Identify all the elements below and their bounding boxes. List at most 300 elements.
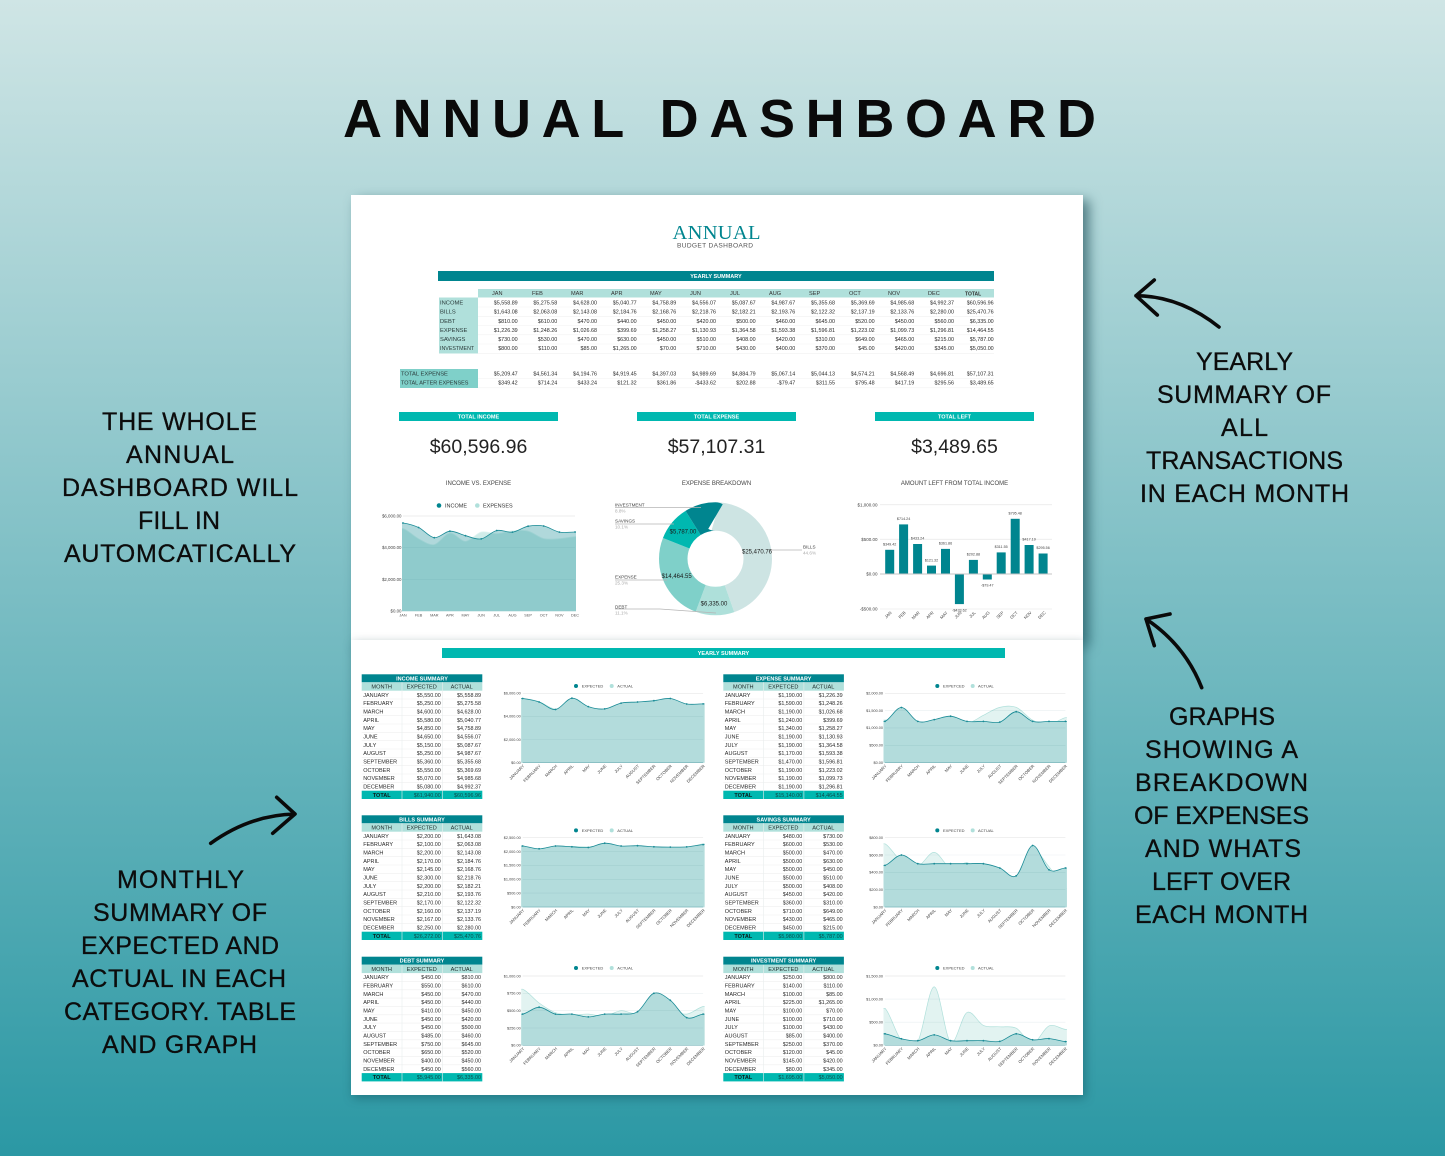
table: investment summary: INVESTMENT SUMMARY — [751, 959, 817, 965]
table: bills summary: $2,210.00 — [417, 892, 441, 898]
table: debt summary: ACTUAL — [451, 967, 473, 973]
chart: income vs expense: $6,000.00 — [382, 514, 402, 518]
table: investment summary: FEBRUARY — [725, 984, 755, 990]
section header: yearly summary — [442, 648, 1005, 658]
table: income summary: OCTOBER — [363, 768, 390, 774]
chart: savings expected vs actual: AUGUST — [987, 908, 1003, 924]
panel: yearly summary table: $2,218.76 — [692, 310, 716, 316]
table: bills summary: $2,170.00 — [417, 900, 441, 906]
table: income summary: $4,600.00 — [417, 709, 441, 715]
table: debt summary: $500.00 — [462, 1025, 481, 1031]
annotation: monthly summary: AND GRAPH — [102, 1031, 257, 1059]
table: bills summary: JUNE — [363, 875, 378, 881]
panel: yearly summary table: $1,265.00 — [613, 346, 637, 352]
table: investment summary: $45.00 — [826, 1050, 843, 1056]
panel: yearly summary table: $800.00 — [498, 346, 518, 352]
panel: yearly summary table: $121.32 — [617, 381, 637, 387]
table: expense summary: OCTOBER — [725, 768, 752, 774]
table: bills summary: MONTH — [371, 825, 392, 831]
panel: yearly summary table: $417.19 — [895, 381, 914, 387]
panel: yearly summary table: $450.00 — [657, 319, 676, 325]
chart: expense breakdown donut — [615, 481, 816, 616]
chart: income expected vs actual — [504, 683, 713, 785]
table: investment summary: $225.00 — [783, 1000, 802, 1006]
table: bills summary: $2,063.08 — [457, 842, 481, 848]
table: investment summary: OCTOBER — [725, 1050, 752, 1056]
table: expense summary — [723, 674, 844, 799]
panel: yearly summary table: $5,050.00 — [970, 346, 994, 352]
panel: yearly summary table: $5,558.89 — [494, 300, 518, 306]
table: debt summary: DECEMBER — [363, 1067, 394, 1073]
panel: yearly summary table — [400, 271, 994, 388]
panel: yearly summary table: $420.00 — [776, 337, 795, 343]
table: expense summary: $399.69 — [823, 718, 843, 724]
chart: expense expected vs actual: NOVEMBER — [1031, 763, 1052, 784]
chart: income expected vs actual: $2,000.00 — [504, 738, 521, 742]
annotation: yearly summary: YEARLY — [1196, 348, 1293, 376]
panel: yearly summary table: $5,355.68 — [811, 300, 835, 306]
table: income summary: $4,992.37 — [457, 784, 481, 790]
chart: amount left from total income: FEB — [897, 610, 907, 619]
annotation: monthly summary: CATEGORY. TABLE — [64, 998, 296, 1026]
chart: investment expected vs actual: JANUARY — [870, 1046, 888, 1063]
table: debt summary: FEBRUARY — [363, 984, 393, 990]
table: bills summary: $2,200.00 — [417, 884, 441, 890]
chart: debt expected vs actual: JUNE — [596, 1046, 608, 1057]
table: investment summary: $800.00 — [823, 975, 843, 981]
chart: expense expected vs actual: $2,000.00 — [866, 692, 883, 696]
panel: yearly summary table: $430.00 — [736, 346, 756, 352]
table: expense summary: SEPTEMBER — [725, 759, 759, 765]
table: savings summary: JANUARY — [725, 834, 751, 840]
chart: income vs expense: SEP — [524, 614, 532, 618]
table: investment summary: MAY — [725, 1009, 737, 1015]
chart: expense expected vs actual: DECEMBER — [1048, 763, 1068, 784]
chart: bills expected vs actual: MARCH — [544, 908, 558, 922]
panel: yearly summary table: $5,044.13 — [811, 372, 835, 378]
chart: income expected vs actual: JANUARY — [508, 763, 526, 781]
table: income summary: $5,087.67 — [457, 743, 481, 749]
table: savings summary: DECEMBER — [725, 925, 756, 931]
table: investment summary: $5,050.00 — [819, 1075, 843, 1081]
chart: amount left from total income: $295.56 — [1036, 546, 1050, 550]
table: savings summary: $5,980.00 — [778, 934, 802, 940]
annotation: monthly summary: MONTHLY — [117, 866, 244, 894]
panel: yearly summary table: $57,107.31 — [967, 372, 994, 378]
table: debt summary: APRIL — [363, 1000, 379, 1006]
table: income summary: MAY — [363, 726, 375, 732]
panel: yearly summary table: $4,884.79 — [732, 372, 756, 378]
chart: expense breakdown donut: BILLS — [803, 545, 816, 550]
table: investment summary: $85.00 — [826, 992, 843, 998]
chart: bills expected vs actual — [504, 828, 713, 930]
table: expense summary: APRIL — [725, 718, 741, 724]
chart: bills expected vs actual: JANUARY — [508, 908, 526, 925]
annotation: whole dashboard fills automatically: THE WHOLE — [102, 408, 257, 436]
chart: income vs expense: JAN — [399, 614, 407, 618]
table: investment summary: $70.00 — [826, 1009, 843, 1015]
chart: investment expected vs actual: $1,000.00 — [866, 997, 883, 1001]
panel: yearly summary table: $470.00 — [578, 319, 597, 325]
table: bills summary: $2,280.00 — [457, 925, 481, 931]
table: expense summary: JULY — [725, 743, 738, 749]
kpi: total income: TOTAL INCOME — [458, 414, 499, 420]
chart: expense expected vs actual: $1,500.00 — [866, 709, 883, 713]
table: investment summary: $110.00 — [824, 984, 843, 990]
panel: yearly summary table: $310.00 — [816, 337, 835, 343]
table: income summary: $61,940.00 — [414, 793, 441, 799]
table: income summary: $5,070.00 — [417, 776, 441, 782]
chart: expense breakdown donut: INVESTMENT — [615, 502, 645, 508]
section header: yearly summary: YEARLY SUMMARY — [698, 651, 750, 657]
table: income summary: $5,275.58 — [457, 701, 481, 707]
table: bills summary: MARCH — [363, 850, 383, 856]
chart: expense expected vs actual: $0.00 — [873, 761, 883, 765]
chart: debt expected vs actual: FEBRUARY — [522, 1046, 542, 1066]
table: savings summary: $465.00 — [823, 917, 843, 923]
table: income summary: NOVEMBER — [363, 776, 395, 782]
table: debt summary: $450.00 — [421, 975, 441, 981]
table: savings summary: $630.00 — [823, 859, 843, 865]
chart: expense expected vs actual: EXPETCED — [943, 683, 965, 688]
table: debt summary: $650.00 — [421, 1050, 441, 1056]
table: savings summary: $360.00 — [783, 900, 802, 906]
panel: yearly summary table: $460.00 — [776, 319, 795, 325]
panel: yearly summary table: $4,989.69 — [692, 372, 716, 378]
table: debt summary: $450.00 — [421, 1067, 441, 1073]
table: bills summary: APRIL — [363, 859, 379, 865]
panel: yearly summary table: $1,226.39 — [494, 328, 518, 334]
table: investment summary: $370.00 — [823, 1042, 843, 1048]
panel: yearly summary table: $1,248.26 — [533, 328, 557, 334]
panel: yearly summary table: SAVINGS — [440, 337, 465, 343]
chart: income vs expense: FEB — [415, 614, 423, 618]
panel: yearly summary table: $4,919.45 — [613, 372, 637, 378]
table: expense summary: $1,026.68 — [819, 709, 843, 715]
chart: income expected vs actual: EXPECTED — [582, 683, 603, 688]
table: bills summary: $2,133.76 — [457, 917, 481, 923]
chart: income expected vs actual: ACTUAL — [617, 683, 634, 688]
panel: yearly summary table: $1,223.02 — [851, 328, 875, 334]
panel: yearly summary table: $2,193.76 — [771, 310, 795, 316]
table: expense summary: AUGUST — [725, 751, 748, 757]
panel: yearly summary table: $2,122.32 — [811, 310, 835, 316]
annotation: whole dashboard fills automatically: ANNUAL — [126, 441, 234, 469]
chart: income vs expense: INCOME — [445, 504, 467, 510]
table: debt summary: $450.00 — [462, 1009, 481, 1015]
chart: expense breakdown donut: EXPENSE — [615, 575, 637, 580]
table: debt summary: $645.00 — [462, 1042, 481, 1048]
panel: yearly summary table: $25,470.76 — [967, 310, 994, 316]
chart: bills expected vs actual: EXPECTED — [582, 828, 603, 833]
chart: income expected vs actual: JUNE — [596, 763, 608, 775]
panel: yearly summary table: $4,987.67 — [771, 300, 795, 306]
dashboard paper: lower sheet — [351, 640, 1083, 1095]
chart: amount left from total income: -$79.47 — [981, 584, 994, 588]
panel: yearly summary table: $1,258.27 — [652, 328, 676, 334]
table: investment summary: $345.00 — [823, 1067, 843, 1073]
table: debt summary: $550.00 — [421, 984, 441, 990]
table: debt summary: $6,335.00 — [457, 1075, 481, 1081]
table: expense summary: EXPENSE SUMMARY — [756, 676, 812, 682]
table: debt summary: $410.00 — [421, 1009, 441, 1015]
chart: savings expected vs actual: $200.00 — [869, 888, 883, 892]
table: savings summary: $500.00 — [783, 850, 802, 856]
chart: expense expected vs actual — [866, 683, 1075, 785]
chart: income expected vs actual: JULY — [613, 763, 624, 774]
panel: yearly summary table: SEP — [809, 291, 820, 297]
kpi: total left: TOTAL LEFT — [938, 414, 972, 420]
chart: savings expected vs actual: APRIL — [925, 907, 937, 920]
table: expense summary: $1,590.00 — [778, 701, 802, 707]
panel: yearly summary table: $730.00 — [498, 337, 518, 343]
chart: income expected vs actual: FEBRUARY — [522, 763, 542, 783]
table: debt summary: JUNE — [363, 1017, 378, 1023]
chart: investment expected vs actual: JULY — [976, 1046, 986, 1057]
title: ANNUAL DASHBOARD — [343, 89, 1096, 149]
panel: yearly summary table: $795.48 — [855, 381, 875, 387]
table: expense summary: $1,340.00 — [778, 726, 802, 732]
table: debt summary: AUGUST — [363, 1034, 387, 1040]
chart: expense breakdown donut: 8.8% — [615, 508, 625, 514]
table: bills summary: $2,300.00 — [417, 875, 441, 881]
panel: yearly summary table: $45.00 — [858, 346, 875, 352]
table: bills summary: $26,272.00 — [414, 934, 441, 940]
panel: yearly summary table: MAY — [650, 291, 662, 297]
chart: amount left from total income: $361.86 — [939, 542, 952, 546]
panel: yearly summary table: APR — [611, 291, 623, 297]
panel: yearly summary table: YEARLY SUMMARY — [690, 274, 742, 280]
panel: yearly summary table: $5,067.14 — [771, 372, 795, 378]
table: savings summary: ACTUAL — [812, 825, 834, 831]
panel: yearly summary table: $5,369.69 — [851, 300, 875, 306]
chart: debt expected vs actual: $0.00 — [511, 1044, 521, 1048]
table: income summary: $5,550.00 — [417, 768, 441, 774]
table: savings summary: $420.00 — [823, 892, 843, 898]
table: debt summary: $460.00 — [462, 1034, 481, 1040]
panel: yearly summary table: $2,280.00 — [930, 310, 954, 316]
table: bills summary: OCTOBER — [363, 909, 390, 915]
table: savings summary: $500.00 — [783, 884, 802, 890]
panel: yearly summary table: $349.42 — [498, 381, 518, 387]
chart: debt expected vs actual: MARCH — [544, 1046, 558, 1061]
chart: amount left from total income: NOV — [1023, 610, 1033, 620]
table: investment summary: $120.00 — [783, 1050, 802, 1056]
chart: income expected vs actual: $4,000.00 — [504, 715, 521, 719]
table: expense summary: JUNE — [725, 734, 739, 740]
panel: yearly summary table: $2,184.76 — [613, 310, 637, 316]
panel: yearly summary table: INCOME — [440, 300, 463, 306]
logo: annual budget dashboard: BUDGET DASHBOARD — [677, 242, 753, 250]
table: income summary: SEPTEMBER — [363, 759, 397, 765]
table: income summary: $4,758.89 — [457, 726, 481, 732]
annotation: graphs breakdown — [1134, 703, 1309, 929]
table: investment summary: DECEMBER — [725, 1067, 756, 1073]
annotation: graphs breakdown: BREAKDOWN — [1135, 769, 1308, 797]
panel: yearly summary table: $6,335.00 — [970, 319, 994, 325]
table: debt summary: $400.00 — [421, 1059, 441, 1065]
chart: savings expected vs actual: ACTUAL — [978, 828, 995, 833]
table: income summary: $4,850.00 — [417, 726, 441, 732]
panel: yearly summary table: $1,593.38 — [771, 328, 795, 334]
chart: income expected vs actual: AUGUST — [624, 763, 641, 779]
table: savings summary: MARCH — [725, 850, 745, 856]
table: expense summary: $1,190.00 — [778, 693, 802, 699]
table: debt summary: MARCH — [363, 992, 383, 998]
chart: investment expected vs actual: JUNE — [958, 1046, 970, 1057]
table: savings summary: $710.00 — [783, 909, 802, 915]
table: debt summary: $485.00 — [421, 1034, 441, 1040]
chart: expense expected vs actual: MARCH — [906, 763, 921, 778]
table: expense summary: MARCH — [725, 709, 745, 715]
panel: yearly summary table: $2,133.76 — [890, 310, 914, 316]
table: savings summary: $500.00 — [783, 875, 802, 881]
table: expense summary: NOVEMBER — [725, 776, 756, 782]
chart: bills expected vs actual: JULY — [613, 908, 624, 918]
annotation: graphs breakdown: EACH MONTH — [1135, 901, 1308, 929]
table: income summary: $5,250.00 — [417, 701, 441, 707]
table: savings summary: $408.00 — [823, 884, 843, 890]
table: bills summary: $1,643.08 — [457, 834, 481, 840]
table: debt summary: TOTAL — [373, 1075, 391, 1081]
table: investment summary: $100.00 — [783, 992, 802, 998]
annotation: yearly summary: SUMMARY OF — [1157, 381, 1331, 409]
panel: yearly summary table: $215.00 — [934, 337, 954, 343]
chart: amount left from total income: -$500.00 — [860, 607, 878, 612]
table: income summary: DECEMBER — [363, 784, 394, 790]
table: investment summary: $100.00 — [783, 1009, 802, 1015]
chart: bills expected vs actual: $0.00 — [511, 905, 521, 909]
chart: bills expected vs actual: APRIL — [563, 907, 575, 920]
table: savings summary: SAVINGS SUMMARY — [757, 817, 811, 823]
chart: expense breakdown donut: 10.1% — [615, 524, 628, 530]
panel: yearly summary table: $450.00 — [657, 337, 676, 343]
chart: savings expected vs actual: $400.00 — [869, 871, 883, 875]
table: bills summary: SEPTEMBER — [363, 900, 397, 906]
chart: investment expected vs actual: $500.00 — [869, 1020, 883, 1024]
table: savings summary: $450.00 — [783, 892, 802, 898]
table: debt summary: $750.00 — [421, 1042, 441, 1048]
chart: amount left from total income: $0.00 — [866, 572, 878, 577]
table: savings summary: $450.00 — [783, 925, 802, 931]
chart: amount left from total income — [857, 481, 1052, 620]
arrow: to monthly tables — [211, 797, 295, 843]
arrow: to yearly summary — [1136, 280, 1219, 327]
arrow: to graphs — [1146, 614, 1202, 688]
chart: amount left from total income: AUG — [981, 610, 991, 620]
table: investment summary: JUNE — [725, 1017, 739, 1023]
panel: yearly summary table: $4,568.49 — [890, 372, 914, 378]
chart: expense breakdown donut: 25.3% — [615, 580, 628, 586]
panel: yearly summary table: $1,596.81 — [811, 328, 835, 334]
annotation: graphs breakdown: OF EXPENSES — [1134, 802, 1309, 830]
panel: yearly summary table: $510.00 — [696, 337, 716, 343]
table: debt summary: $610.00 — [462, 984, 481, 990]
panel: yearly summary table: $4,992.37 — [930, 300, 954, 306]
kpi: total expense: $57,107.31 — [668, 436, 765, 458]
chart: income vs expense: AUG — [508, 614, 517, 618]
chart: amount left from total income: $795.48 — [1009, 512, 1022, 516]
chart: savings expected vs actual: JUNE — [958, 908, 970, 919]
table: investment summary: MARCH — [725, 992, 745, 998]
table: bills summary: ACTUAL — [451, 825, 473, 831]
chart: debt expected vs actual: EXPECTED — [582, 965, 603, 970]
table: debt summary: $450.00 — [421, 992, 441, 998]
table: bills summary: JULY — [363, 884, 377, 890]
table: investment summary: $710.00 — [823, 1017, 843, 1023]
table: debt summary: NOVEMBER — [363, 1059, 395, 1065]
panel: yearly summary table: $4,556.07 — [692, 300, 716, 306]
table: bills summary: $25,470.76 — [454, 934, 481, 940]
chart: investment expected vs actual: $0.00 — [873, 1044, 883, 1048]
panel: yearly summary table: JUN — [690, 291, 701, 297]
chart: bills expected vs actual: $1,500.00 — [504, 864, 521, 868]
chart: investment expected vs actual: MAY — [944, 1046, 953, 1056]
table: debt summary: $470.00 — [462, 992, 481, 998]
panel: yearly summary table: $5,275.58 — [533, 300, 557, 306]
panel: yearly summary table: $295.56 — [934, 381, 954, 387]
table: debt summary: $450.00 — [421, 1025, 441, 1031]
chart: amount left from total income: $349.42 — [883, 542, 896, 546]
table: investment summary: $420.00 — [823, 1059, 843, 1065]
table: investment summary: $250.00 — [783, 975, 802, 981]
table: bills summary: $2,122.32 — [457, 900, 481, 906]
chart: amount left from total income: MAR — [911, 610, 921, 620]
table: income summary: $4,556.07 — [457, 734, 481, 740]
chart: bills expected vs actual: FEBRUARY — [522, 908, 542, 927]
panel: yearly summary table: $2,168.76 — [652, 310, 676, 316]
annotation: yearly summary: TRANSACTIONS — [1146, 447, 1343, 475]
table: expense summary: MAY — [725, 726, 737, 732]
table: bills summary: JANUARY — [363, 834, 389, 840]
panel: yearly summary table: MAR — [571, 291, 583, 297]
chart: bills expected vs actual: OCTOBER — [655, 908, 673, 926]
chart: expense breakdown donut: DEBT — [615, 604, 627, 610]
table: income summary — [362, 674, 482, 799]
table: income summary: $5,040.77 — [457, 718, 481, 724]
table: income summary: $5,558.89 — [457, 693, 481, 699]
chart: debt expected vs actual: $500.00 — [507, 1009, 521, 1013]
table: income summary: $5,080.00 — [417, 784, 441, 790]
chart: amount left from total income: MAY — [939, 610, 949, 620]
panel: yearly summary table: $520.00 — [855, 319, 875, 325]
annotation: monthly summary: EXPECTED AND — [81, 932, 279, 960]
table: bills summary: EXPECTED — [407, 825, 437, 831]
chart: expense expected vs actual: ACTUAL — [978, 683, 995, 688]
panel: yearly summary table: $202.88 — [736, 381, 756, 387]
chart: debt expected vs actual: MAY — [581, 1046, 591, 1056]
chart: savings expected vs actual: OCTOBER — [1017, 908, 1035, 926]
table: savings summary: $730.00 — [823, 834, 843, 840]
annotation: monthly summary — [64, 866, 296, 1059]
table: bills summary: AUGUST — [363, 892, 387, 898]
table: debt summary: MONTH — [371, 967, 392, 973]
chart: amount left from total income: APR — [925, 610, 935, 620]
panel: yearly summary table: $1,099.73 — [890, 328, 914, 334]
table: expense summary: $1,190.00 — [778, 734, 802, 740]
chart: amount left from total income: $714.24 — [897, 517, 910, 521]
chart: expense expected vs actual: JUNE — [958, 763, 970, 775]
table: debt summary: JULY — [363, 1025, 377, 1031]
table: expense summary: $1,258.27 — [819, 726, 843, 732]
table: investment summary: ACTUAL — [812, 967, 834, 973]
chart: expense breakdown donut: $14,464.55 — [662, 574, 692, 580]
table: income summary: EXPECTED — [407, 684, 437, 690]
chart: debt expected vs actual: $250.00 — [507, 1026, 521, 1030]
table: expense summary: $1,190.00 — [778, 743, 802, 749]
panel: yearly summary table: $530.00 — [538, 337, 557, 343]
chart: debt expected vs actual: $750.00 — [507, 992, 521, 996]
